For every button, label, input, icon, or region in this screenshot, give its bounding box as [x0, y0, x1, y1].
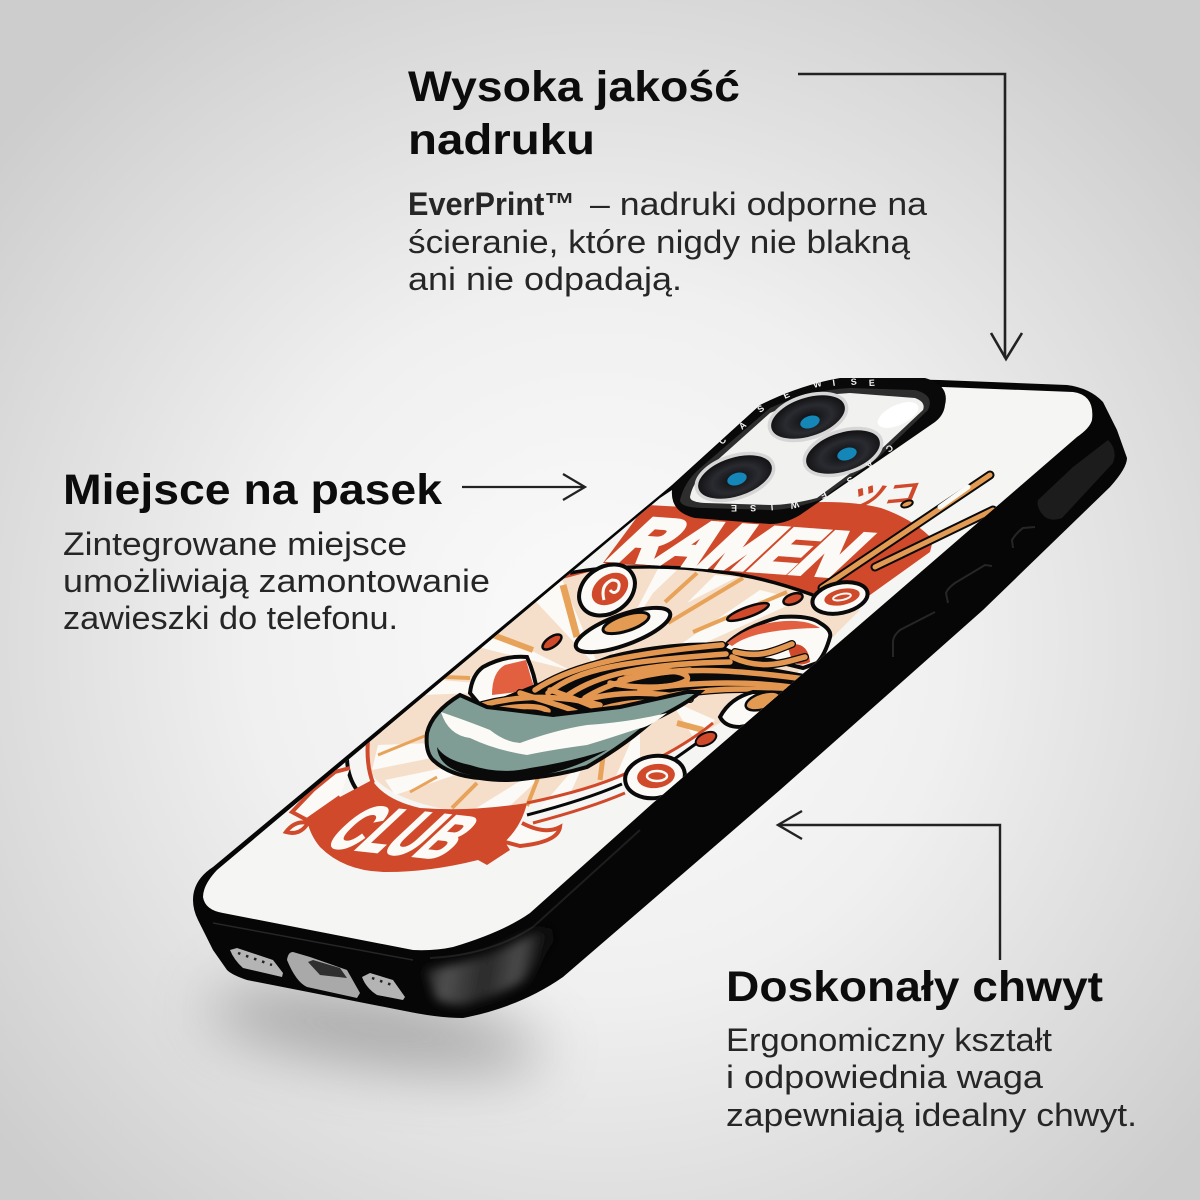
lower egg [720, 688, 790, 727]
casewise ring text: CASEWISE [731, 442, 895, 513]
ramen lettering: RAMEN [593, 507, 889, 588]
top red banner [603, 502, 933, 595]
club lettering: CLUB [308, 794, 497, 872]
orange dot [900, 499, 914, 509]
text block: strap slot: Zintegrowane miejsce [63, 526, 407, 562]
casewise ring text: CASEWISE [717, 377, 875, 446]
camera ring [672, 378, 946, 524]
text block: grip: i odpowiednia waga [726, 1059, 1043, 1095]
right ribbon [505, 823, 560, 846]
meat slice right [723, 617, 830, 668]
text block: strap slot [63, 526, 490, 636]
arrow: strap slot to phone [462, 474, 585, 500]
bowl [427, 692, 700, 780]
red dot [694, 730, 718, 748]
text block: grip [726, 1022, 1137, 1133]
text block: print quality: ani nie odpadają. [408, 261, 682, 297]
noodles [480, 642, 815, 715]
text block: print quality: ścieranie, które nigdy nie blakną [408, 224, 910, 260]
phone case illustration [193, 377, 1127, 1018]
small red ovals [540, 591, 804, 652]
text block: print quality [408, 186, 927, 297]
text block: strap slot: umożliwiają zamontowanie [63, 563, 490, 599]
side buttons [893, 527, 1035, 657]
charging port [287, 952, 360, 998]
naruto top left [577, 562, 637, 618]
text block: print quality: EverPrint™ [408, 186, 575, 222]
case body [193, 378, 1127, 1018]
text block: strap slot: zawieszki do telefonu. [63, 600, 398, 636]
bottom corner gloss [425, 925, 555, 1005]
left ribbon [286, 768, 350, 833]
camera inner rim [680, 388, 930, 510]
lens left [690, 445, 780, 509]
side grip block [1038, 440, 1115, 520]
glass glare [874, 397, 922, 433]
bottom shelf line [213, 923, 413, 960]
lower red banner [307, 780, 527, 872]
naruto bottom [622, 752, 688, 802]
heading: strap slot: Miejsce na pasek [63, 466, 442, 514]
speaker left [230, 948, 283, 977]
text block: print quality: – nadruki odporne na [590, 186, 927, 222]
sun rays orange [378, 573, 787, 808]
text block: grip: zapewniają idealny chwyt. [726, 1097, 1137, 1133]
banner underline [570, 567, 813, 595]
heading: print quality: Wysoka jakość [408, 63, 740, 111]
heading: print quality [408, 63, 740, 164]
phone drop shadow [202, 973, 548, 1087]
casewise ring text [717, 377, 895, 513]
arrow: print quality to phone back [798, 74, 1022, 359]
white back plate [203, 385, 1092, 950]
sunburst disc [369, 566, 860, 812]
katakana mark: ツコ [846, 477, 925, 514]
chopsticks [822, 475, 993, 588]
heading: grip: Doskonały chwyt [726, 963, 1103, 1011]
egg [574, 606, 672, 654]
lens top [763, 385, 853, 449]
disc rim lines [347, 570, 713, 823]
camera glass [690, 393, 924, 505]
sun rays white [372, 565, 800, 815]
heading: print quality: nadruku [408, 116, 595, 164]
ramen artwork [286, 475, 993, 872]
arrow: grip to phone side [778, 811, 1000, 960]
meat slice in bowl [470, 657, 537, 705]
plate edge highlight [430, 830, 640, 958]
lens right [798, 420, 888, 484]
speaker right [362, 973, 405, 1000]
text block: grip: Ergonomiczny kształt [726, 1022, 1052, 1058]
naruto top right [810, 580, 870, 616]
